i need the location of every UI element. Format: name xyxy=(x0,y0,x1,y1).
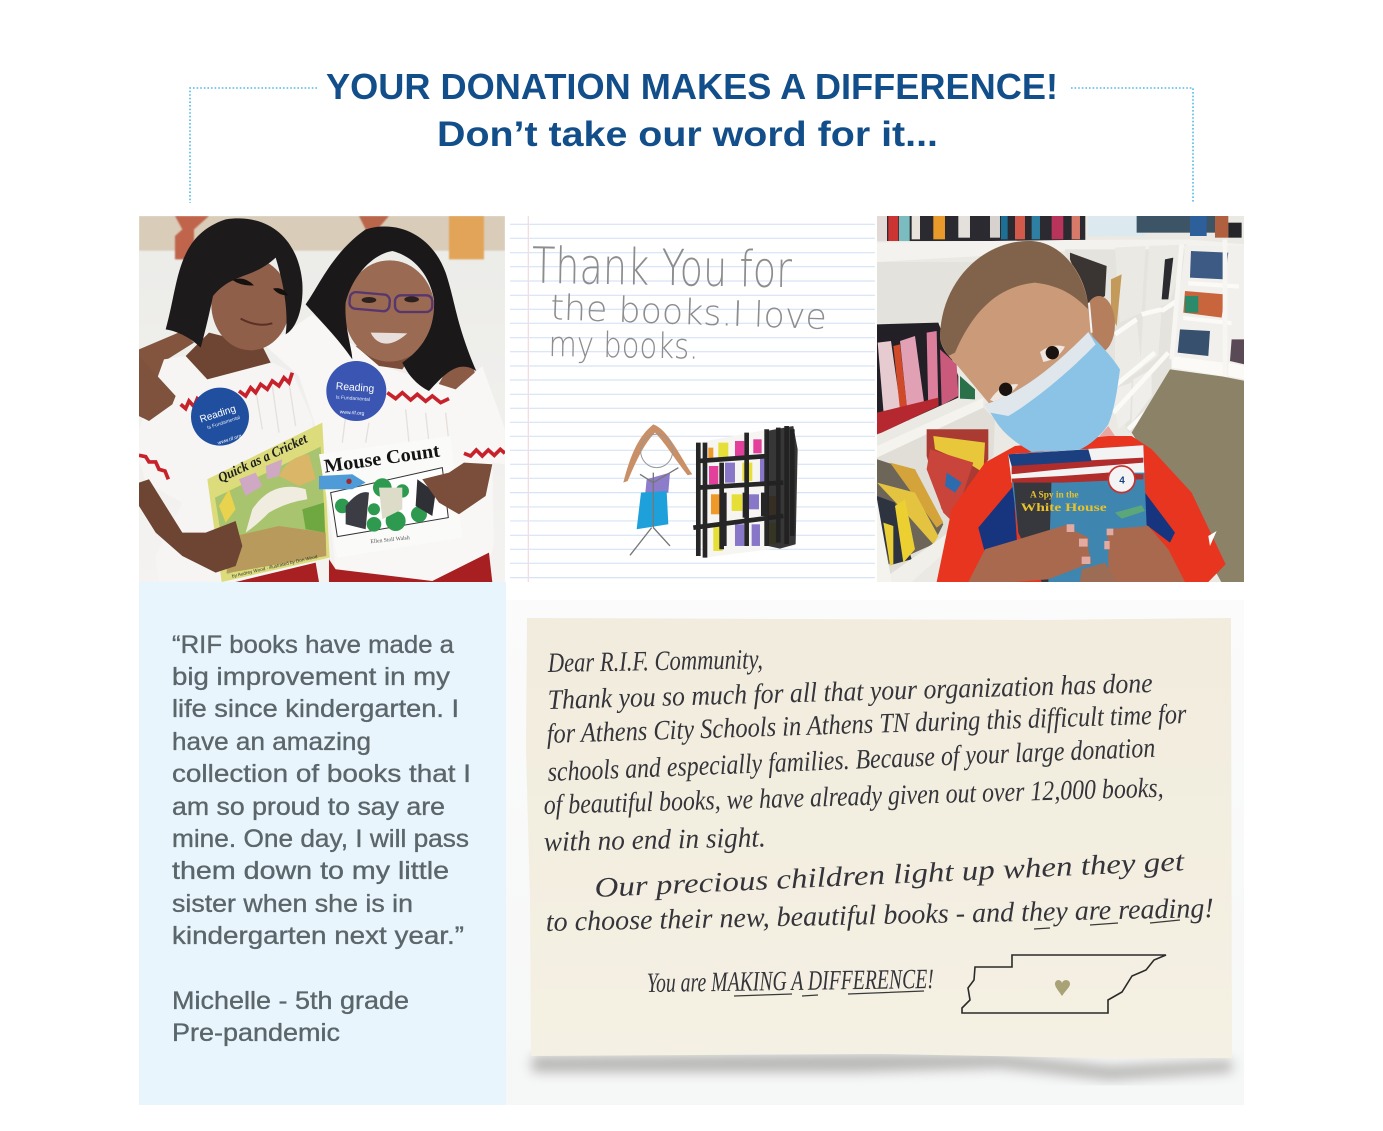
hands xyxy=(139,479,242,573)
letter handwriting: You are MAKING A DIFFERENCE! xyxy=(647,964,934,999)
letter handwriting: for Athens City Schools in Athens TN during this difficult time for xyxy=(546,699,1187,750)
blouses xyxy=(143,358,179,421)
button: Reading is Fundamental (left): Reading xyxy=(199,404,237,425)
title line 2: Don’t take our word for it... xyxy=(437,115,938,154)
boy: hands xyxy=(968,524,1185,582)
button: Reading is Fundamental (left): Is Fundamental xyxy=(206,415,241,431)
quote text: collection of books that I xyxy=(172,760,471,788)
quote attribution: Pre-pandemic xyxy=(172,1019,340,1047)
quote text: have an amazing xyxy=(172,728,371,756)
skirts xyxy=(236,563,319,582)
quote text xyxy=(172,631,471,950)
button: Reading is Fundamental (right): www.rif.org xyxy=(340,409,365,417)
letter handwriting: Thank you so much for all that your organization has done xyxy=(547,668,1153,716)
icon: Tennessee outline with heart xyxy=(962,955,1166,1013)
quote attribution xyxy=(172,987,409,1047)
quote text: mine. One day, I will pass xyxy=(172,825,469,853)
carpet xyxy=(1132,369,1245,583)
book: Mouse Count xyxy=(319,436,462,558)
photo: boy in mask holding a book in a library xyxy=(875,216,1245,583)
quote text: am so proud to say are xyxy=(172,793,445,821)
quote attribution: Michelle - 5th grade xyxy=(172,987,409,1015)
book: A Spy in the White House: White House xyxy=(1021,501,1107,514)
quote text: “RIF books have made a xyxy=(172,631,454,659)
letter handwriting: of beautiful books, we have already given out over 12,000 books, xyxy=(543,773,1164,821)
left arm and hand xyxy=(139,331,194,421)
letter handwriting: Dear R.I.F. Community, xyxy=(547,644,763,679)
panel: handwritten letter xyxy=(506,600,1244,1105)
quote text: them down to my little xyxy=(172,857,449,885)
letter paper xyxy=(526,618,1232,1058)
crayon drawing: bookshelf xyxy=(693,426,798,558)
letter handwriting: with no end in sight. xyxy=(543,822,766,858)
necks and faces xyxy=(186,333,271,379)
hair xyxy=(166,218,303,348)
boy: head xyxy=(940,241,1122,449)
photo: two girls holding books xyxy=(139,216,505,586)
book: Quick as a Cricket xyxy=(207,423,330,582)
boy: face mask xyxy=(985,303,1120,452)
book: A Spy in the White House: 4 xyxy=(1119,475,1125,486)
book: A Spy in the White House xyxy=(1008,445,1147,582)
button: Reading is Fundamental (right): Is Fundamental xyxy=(336,395,370,403)
title xyxy=(326,66,1058,154)
letter handwriting: to choose their new, beautiful books - and they are reading! xyxy=(545,893,1214,938)
book: Mouse Count: Ellen Stoll Walsh xyxy=(370,535,410,545)
left books xyxy=(877,323,958,434)
quote text: big improvement in my xyxy=(172,663,451,691)
handwritten underlines xyxy=(734,920,1180,996)
quote text: kindergarten next year.” xyxy=(172,922,464,950)
letter handwriting: schools and especially families. Because of your large donation xyxy=(547,733,1156,788)
pencil message: the books.I love xyxy=(550,288,828,338)
zigzag trim xyxy=(139,373,505,479)
quote text: life since kindergarten. I xyxy=(172,695,459,723)
title line 1: YOUR DONATION MAKES A DIFFERENCE! xyxy=(326,66,1058,107)
facial details xyxy=(232,279,432,344)
button: Reading is Fundamental (right) xyxy=(326,361,386,421)
pencil message: my books. xyxy=(548,325,699,368)
letter handwriting xyxy=(543,644,1214,999)
pencil message: Thank You for xyxy=(531,237,793,299)
ruled lines xyxy=(510,224,875,578)
library shelves xyxy=(877,216,1245,583)
book: Quick as a Cricket: by Audrey Wood · illustrated by Don Wood xyxy=(231,554,318,579)
button: Reading is Fundamental (right): Reading xyxy=(335,381,375,395)
book: A Spy in the White House: A Spy in the xyxy=(1030,491,1078,501)
heading frame: dotted bracket xyxy=(190,88,1193,203)
pencil message xyxy=(531,237,828,368)
crayon drawing: person xyxy=(623,424,692,555)
letter handwriting: Our precious children light up when they get xyxy=(594,846,1186,904)
book: Mouse Count: Mouse Count xyxy=(323,440,442,478)
quote text: sister when she is in xyxy=(172,890,413,918)
boy: red shirt xyxy=(937,436,1226,582)
panel: student quote xyxy=(139,582,506,1105)
photo: child's thank-you note on lined paper xyxy=(506,216,877,582)
button: Reading is Fundamental (left) xyxy=(191,388,249,447)
book: Quick as a Cricket: Quick as a Cricket xyxy=(216,431,311,486)
button: Reading is Fundamental (left): www.rif.org xyxy=(217,433,243,447)
